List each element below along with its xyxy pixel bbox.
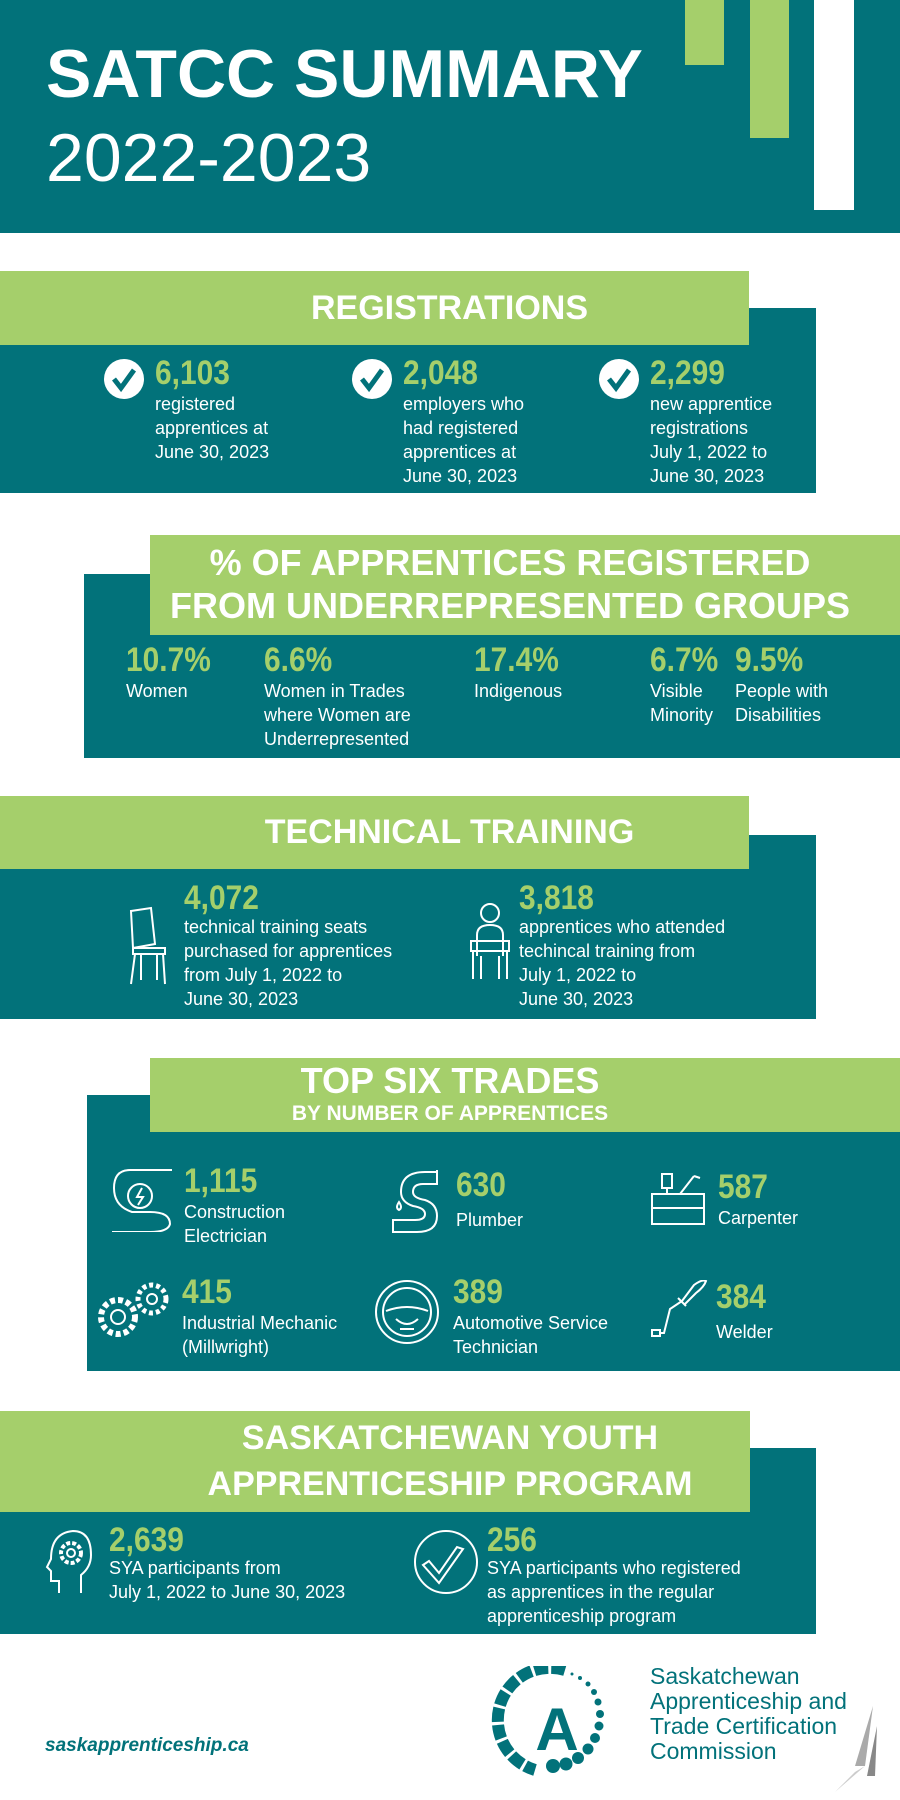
panel: registrations xyxy=(0,271,816,493)
stat: visible minority: Minority xyxy=(650,705,713,725)
trade: millwright: (Millwright) xyxy=(182,1337,269,1357)
stat: registered: as apprentices in the regular xyxy=(487,1582,714,1602)
stat 2: apprentices at xyxy=(403,442,516,462)
year: 2022-2023 xyxy=(46,120,371,196)
heading: TECHNICAL TRAINING xyxy=(265,813,634,851)
stat: women: Women xyxy=(126,681,188,701)
stat: women in trades: Underrepresented xyxy=(264,729,409,749)
stat: disabilities xyxy=(735,641,828,725)
heading xyxy=(150,535,900,635)
stat: visible minority: 6.7% xyxy=(650,641,718,679)
stat 3 xyxy=(599,354,772,486)
stat: attended: June 30, 2023 xyxy=(519,989,633,1009)
icon: logo mark: A xyxy=(535,1696,579,1763)
stat 2 xyxy=(352,354,524,486)
icon: gears xyxy=(98,1282,168,1337)
stat: indigenous xyxy=(474,641,562,701)
stat: seats: technical training seats xyxy=(184,917,367,937)
icon: head with gear xyxy=(46,1530,92,1593)
stat: attended: techincal training from xyxy=(519,941,695,961)
icon: chair xyxy=(130,906,166,984)
heading: BY NUMBER OF APPRENTICES xyxy=(292,1102,608,1125)
logo text: Commission xyxy=(650,1738,777,1764)
stat 1 xyxy=(104,354,269,462)
header band xyxy=(0,0,900,233)
panel: technical training xyxy=(0,796,816,1019)
stat 1: registered xyxy=(155,394,235,414)
stat: participants xyxy=(46,1521,345,1602)
icon: wire xyxy=(112,1169,172,1232)
icon: check xyxy=(352,359,392,399)
trade: millwright: Industrial Mechanic xyxy=(182,1313,337,1333)
trade: electrician: 1,115 xyxy=(184,1162,257,1200)
icon: toolbox xyxy=(651,1173,705,1225)
stat: visible minority: Visible xyxy=(650,681,703,701)
icon: logo mark xyxy=(492,1666,604,1776)
icon: torch xyxy=(651,1280,708,1337)
icon: check circle xyxy=(414,1530,478,1594)
stat: disabilities: Disabilities xyxy=(735,705,821,725)
stat: disabilities: 9.5% xyxy=(735,641,803,679)
stat: women xyxy=(126,641,211,701)
stat: women in trades: where Women are xyxy=(264,705,411,725)
stat: women in trades: Women in Trades xyxy=(264,681,405,701)
stat: seats: June 30, 2023 xyxy=(184,989,298,1009)
trade: carpenter: 587 xyxy=(718,1168,768,1206)
stat 1: June 30, 2023 xyxy=(155,442,269,462)
trade: millwright: 415 xyxy=(182,1273,232,1311)
stat: registered: SYA participants who registered xyxy=(487,1558,741,1578)
stat 2: 2,048 xyxy=(403,354,478,392)
stat: seats: 4,072 xyxy=(184,879,259,917)
trade: automotive: 389 xyxy=(453,1273,503,1311)
heading: APPRENTICESHIP PROGRAM xyxy=(208,1465,692,1503)
title: SATCC SUMMARY xyxy=(46,36,643,112)
heading: FROM UNDERREPRESENTED GROUPS xyxy=(170,585,850,626)
heading xyxy=(0,271,749,345)
panel: top six trades xyxy=(87,1058,900,1371)
stat 3: June 30, 2023 xyxy=(650,466,764,486)
panel: youth apprenticeship xyxy=(0,1411,816,1634)
stat: attended xyxy=(470,879,725,1009)
logo text xyxy=(650,1663,847,1764)
heading: SASKATCHEWAN YOUTH xyxy=(242,1419,658,1457)
trade: automotive: Automotive Service xyxy=(453,1313,608,1333)
trade: plumber xyxy=(392,1166,523,1233)
stat: visible minority xyxy=(650,641,718,725)
panel: underrepresented groups xyxy=(84,535,900,758)
stat 2: June 30, 2023 xyxy=(403,466,517,486)
stat: disabilities: People with xyxy=(735,681,828,701)
heading xyxy=(0,1411,750,1512)
trade: welder: 384 xyxy=(716,1278,766,1316)
stat: indigenous: Indigenous xyxy=(474,681,562,701)
icon: check xyxy=(104,359,144,399)
stat: seats xyxy=(130,879,392,1009)
trade: welder: Welder xyxy=(716,1322,773,1342)
trade: electrician: Electrician xyxy=(184,1226,267,1246)
stat 3: July 1, 2022 to xyxy=(650,442,767,462)
stat: registered: 256 xyxy=(487,1521,537,1559)
logo text: Trade Certification xyxy=(650,1713,837,1739)
stat 3: new apprentice xyxy=(650,394,772,414)
heading: % OF APPRENTICES REGISTERED xyxy=(210,542,810,583)
logo xyxy=(492,1663,877,1792)
stat: indigenous: 17.4% xyxy=(474,641,559,679)
trade: plumber: Plumber xyxy=(456,1210,523,1230)
heading xyxy=(0,796,749,869)
stat: attended: 3,818 xyxy=(519,879,594,917)
stat: seats: from July 1, 2022 to xyxy=(184,965,342,985)
trade: carpenter xyxy=(651,1168,798,1228)
stat 1: 6,103 xyxy=(155,354,230,392)
heading xyxy=(150,1058,900,1132)
stat 2: employers who xyxy=(403,394,524,414)
stat: women in trades: 6.6% xyxy=(264,641,332,679)
stat: participants: SYA participants from xyxy=(109,1558,281,1578)
trade: welder xyxy=(651,1278,773,1342)
heading: TOP SIX TRADES xyxy=(301,1060,599,1101)
stat: participants: 2,639 xyxy=(109,1521,184,1559)
stat: seats: purchased for apprentices xyxy=(184,941,392,961)
trade: millwright xyxy=(98,1273,337,1357)
trade: electrician xyxy=(112,1162,285,1246)
trade: plumber: 630 xyxy=(456,1166,506,1204)
logo text: Saskatchewan xyxy=(650,1663,800,1689)
stat: registered: apprenticeship program xyxy=(487,1606,676,1626)
icon: check xyxy=(599,359,639,399)
trade: automotive xyxy=(375,1273,608,1357)
icon: pipe xyxy=(392,1170,438,1233)
stat 3: 2,299 xyxy=(650,354,725,392)
footer url: saskapprenticeship.ca xyxy=(45,1735,249,1756)
decorative bars xyxy=(685,0,724,65)
stat 1: apprentices at xyxy=(155,418,268,438)
icon: grey swoosh xyxy=(836,1706,877,1792)
heading: REGISTRATIONS xyxy=(311,289,588,327)
stat: women: 10.7% xyxy=(126,641,211,679)
icon: steering wheel xyxy=(375,1280,439,1344)
stat 3: registrations xyxy=(650,418,748,438)
trade: automotive: Technician xyxy=(453,1337,538,1357)
logo text: Apprenticeship and xyxy=(650,1688,847,1714)
icon: student xyxy=(470,903,510,979)
stat: registered xyxy=(414,1521,741,1626)
trade: electrician: Construction xyxy=(184,1202,285,1222)
stat 2: had registered xyxy=(403,418,518,438)
stat: women in trades xyxy=(264,641,411,749)
stat: attended: July 1, 2022 to xyxy=(519,965,636,985)
stat: attended: apprentices who attended xyxy=(519,917,725,937)
trade: carpenter: Carpenter xyxy=(718,1208,798,1228)
stat: participants: July 1, 2022 to June 30, 2023 xyxy=(109,1582,345,1602)
